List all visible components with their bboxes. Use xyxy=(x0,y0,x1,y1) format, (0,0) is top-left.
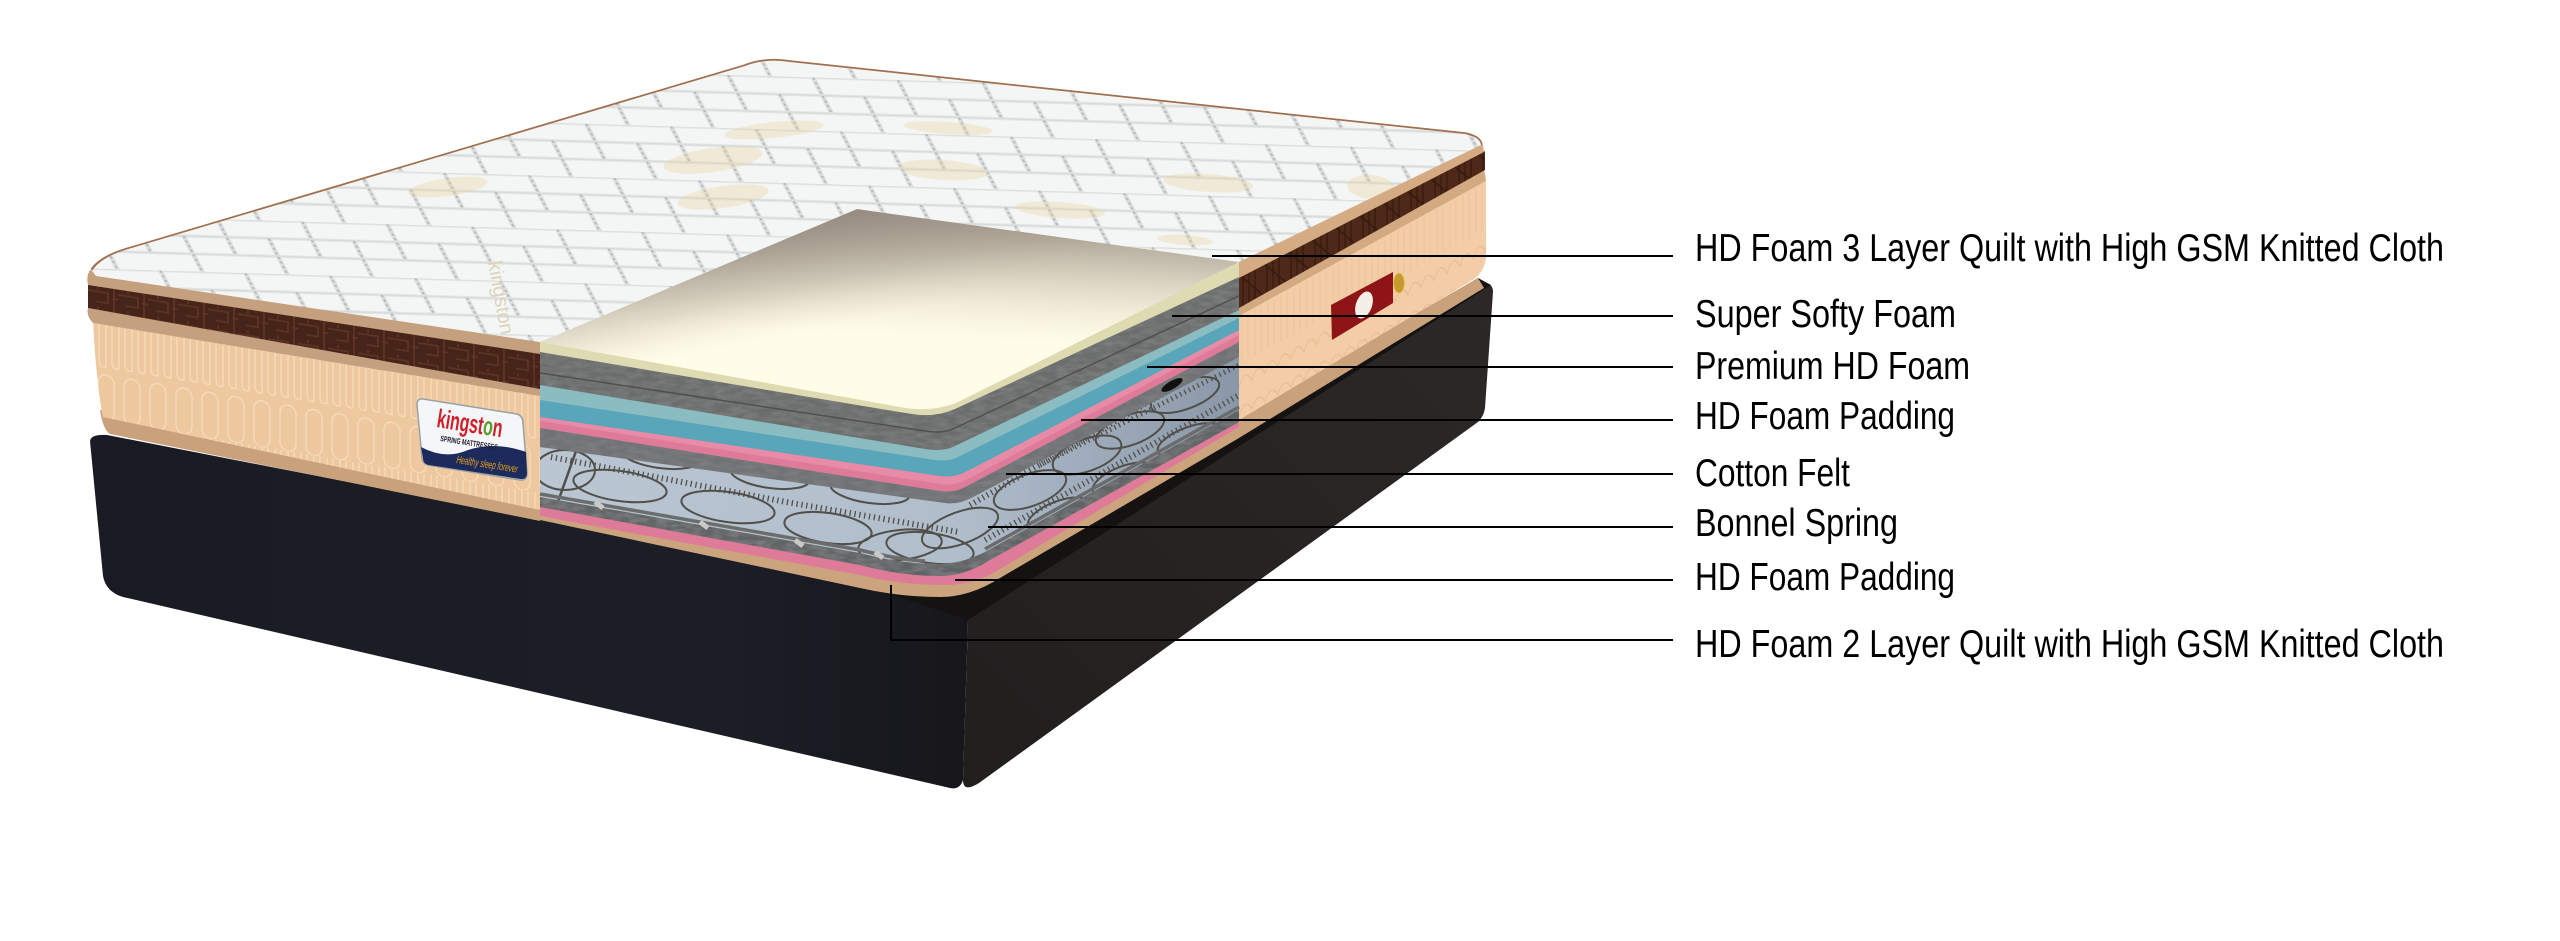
base left face xyxy=(90,435,968,788)
dark spot in felt xyxy=(1160,376,1184,394)
label 4: HD Foam Padding xyxy=(1695,395,1955,438)
layer: cream foam side xyxy=(540,260,1239,415)
woven brand mark on quilt: kingston xyxy=(483,259,518,336)
left lower piping xyxy=(88,308,540,396)
brand tag: red side tag with gold medal xyxy=(1331,272,1404,340)
cut-away layer stack xyxy=(535,209,1250,597)
layer: grey foam seam xyxy=(540,296,1239,432)
right upper piping xyxy=(1239,136,1484,278)
layer: bottom HD foam padding (pink) xyxy=(540,260,1239,585)
gold quilt motifs xyxy=(407,117,1396,247)
top edge piping xyxy=(92,61,1481,270)
bonnel springs xyxy=(540,363,1239,564)
layer: premium HD foam (teal) xyxy=(540,260,1239,476)
base: black box foundation xyxy=(90,278,1493,788)
layer: bottom quilt tan edge xyxy=(540,260,1239,597)
shadow under mattress xyxy=(860,278,1491,620)
layer: super softy foam (grey) xyxy=(540,260,1239,450)
left brown band xyxy=(88,284,540,389)
quilt fabric xyxy=(92,61,1481,342)
spring frame wire xyxy=(540,407,1239,561)
bottom tan piping xyxy=(100,278,1484,521)
label 6: Bonnel Spring xyxy=(1695,502,1898,545)
right lower piping xyxy=(1239,168,1486,316)
right tan panel xyxy=(1239,181,1486,420)
brand label: kingston xyxy=(417,399,527,480)
infographic: mattress cross-section with layer labels xyxy=(87,58,2442,788)
base right face xyxy=(940,284,1493,787)
leader lines xyxy=(891,256,1673,640)
layer: HD foam padding (pink) xyxy=(540,260,1239,491)
left upper piping xyxy=(87,270,540,354)
layer: teal light band xyxy=(540,260,1239,460)
brand label: kingston: kingston xyxy=(435,403,505,443)
layer labels xyxy=(1695,227,2444,666)
layer: cotton felt xyxy=(540,260,1239,503)
brand label: kingston: SPRING MATTRESSES xyxy=(440,434,499,452)
right brown band xyxy=(1239,151,1485,308)
quilted top surface xyxy=(92,61,1481,342)
label 3: Premium HD Foam xyxy=(1695,345,1970,388)
layer: pink highlight xyxy=(540,260,1239,484)
brand label: kingston: Healthy sleep forever xyxy=(456,454,519,476)
layer: spring floor xyxy=(540,260,1239,564)
left tan panel xyxy=(93,323,540,510)
label 7: HD Foam Padding xyxy=(1695,556,1955,599)
label 2: Super Softy Foam xyxy=(1695,293,1956,336)
mattress: tan side panels and top band xyxy=(87,136,1486,521)
layer: cream top foam xyxy=(540,209,1239,409)
layer: lower cotton felt frame xyxy=(540,260,1239,576)
label 5: Cotton Felt xyxy=(1695,452,1850,495)
